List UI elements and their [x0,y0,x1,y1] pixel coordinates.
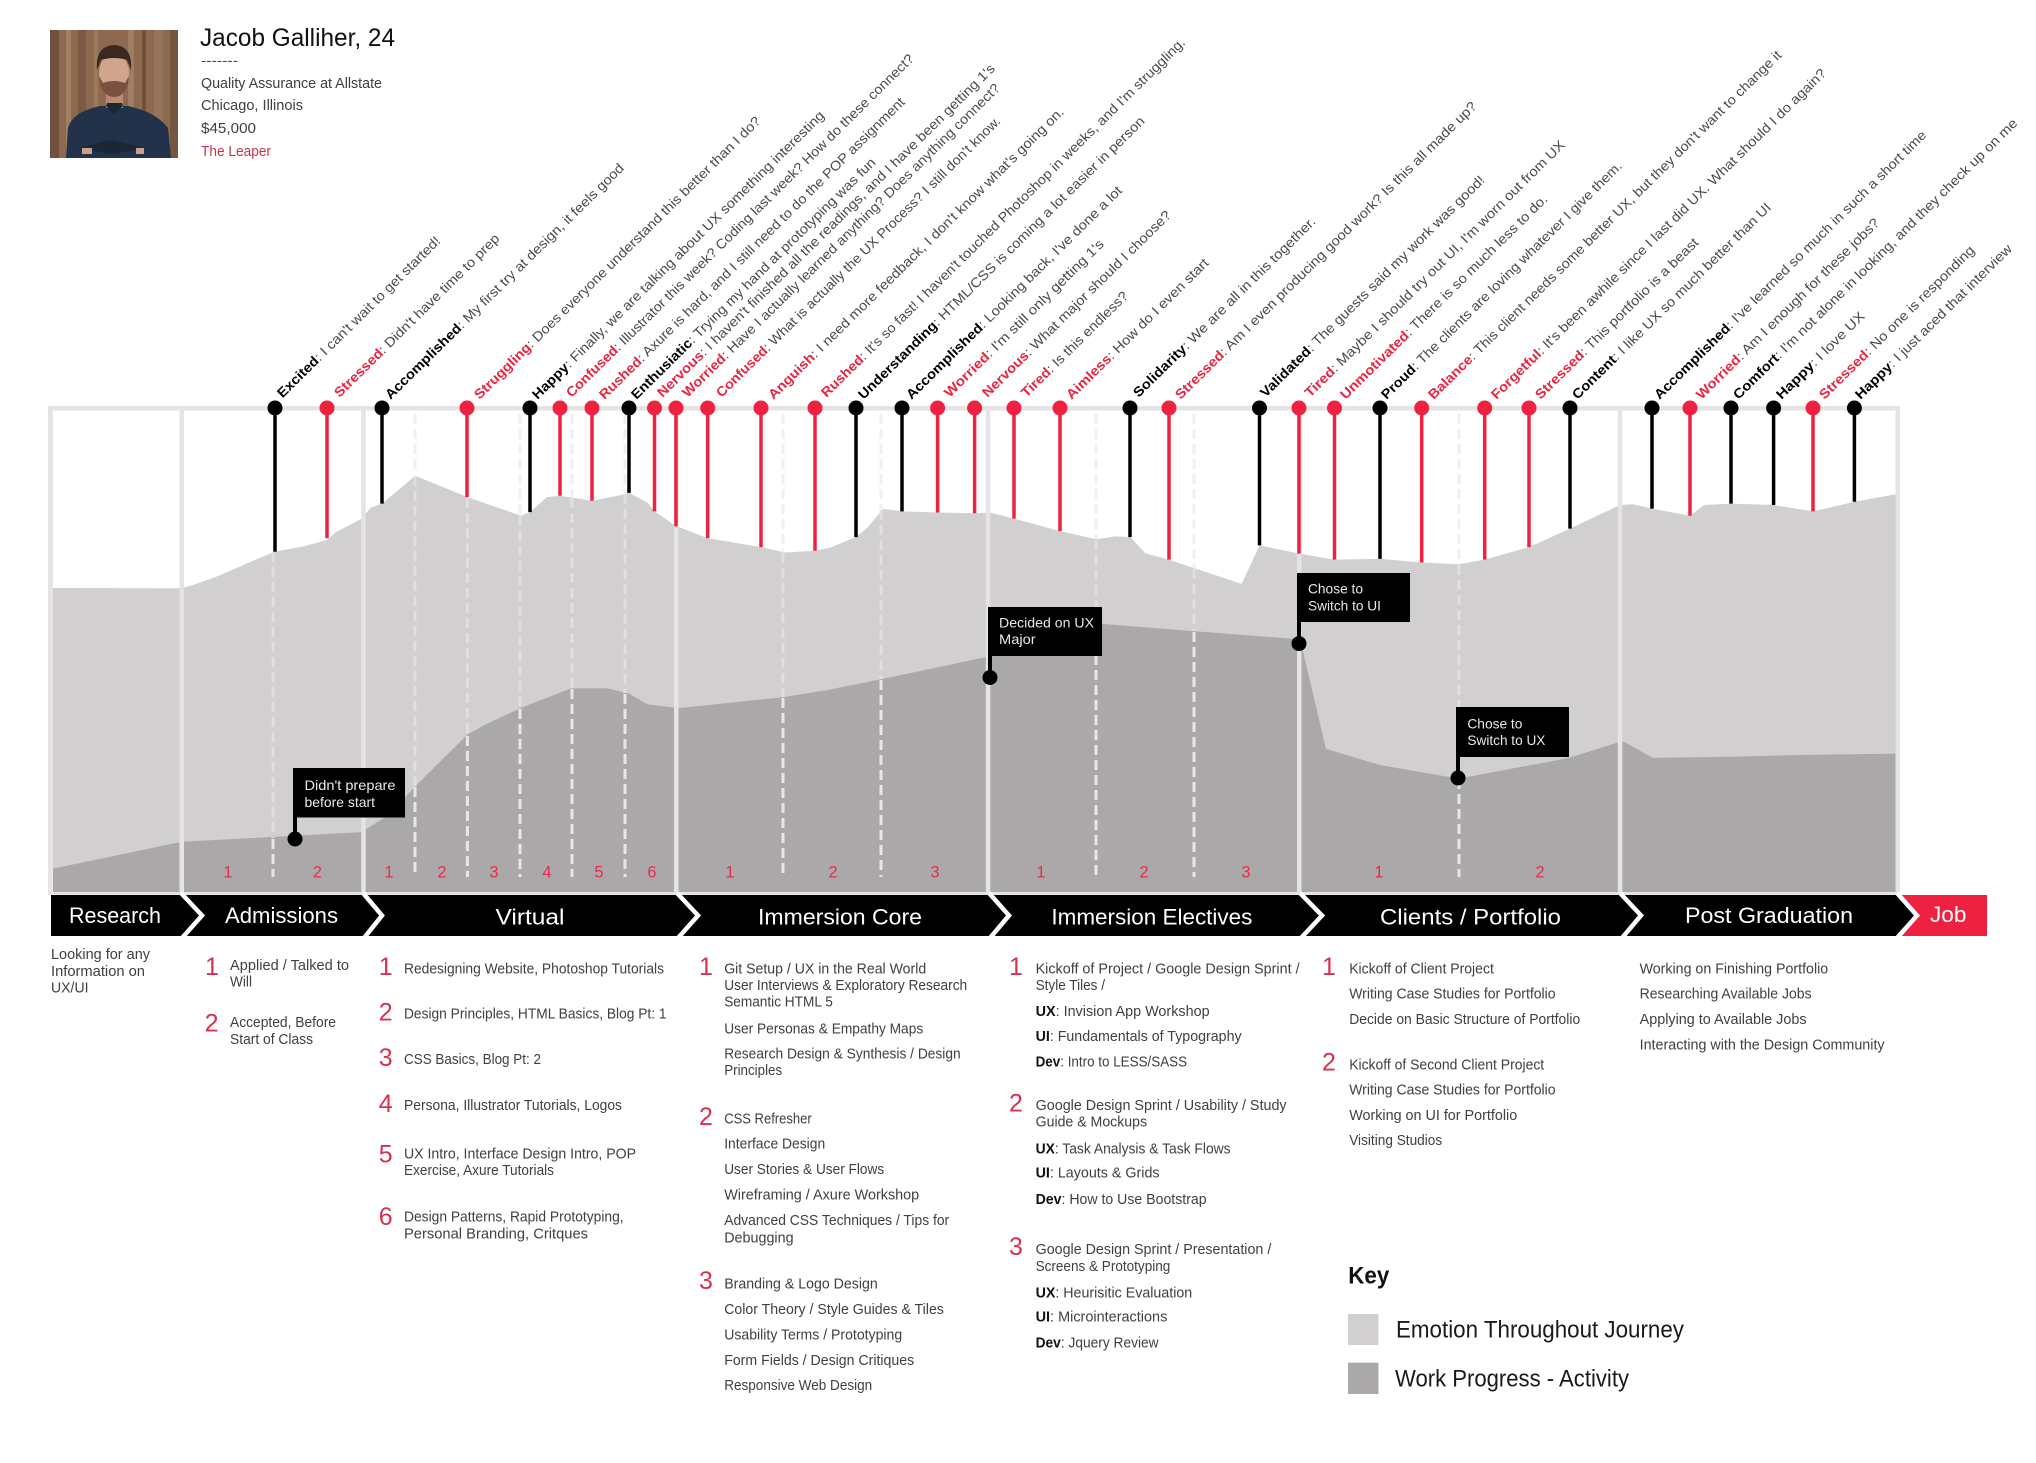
emotion pin: Stressed 2: Stressed: Am I even producing good work? Is this all made up? [1172,99,1480,402]
emotion pin: Anguish: Anguish: I need more feedback, I don't know what's going on. [765,104,1067,402]
sub-phase numbers in chart: 2 [313,864,322,882]
column: Immersion Electives: UX: Heurisitic Evaluation [1036,1285,1192,1301]
phase banner [51,893,1987,938]
column: Clients / Portfolio: Decide on Basic Structure of Portfolio [1349,1012,1580,1028]
emotion pin: Worried: Worried: Have I actually learned anything? Does anything connect? [679,81,1003,400]
emotion pin: Nervous 2: Nervous: What major should I choose? [979,208,1174,400]
sub-phase numbers in chart: 6 [647,864,657,882]
emotion pin: Worried 2: Worried: I'm still only getting 1's [941,236,1107,400]
callout: Chose to Switch to UX: Chose to [1467,716,1523,732]
phase banner: Immersion Core [758,905,922,930]
emotion pin: Happy 3: Happy: I love UX [1773,309,1868,402]
sub-phase numbers in chart: 1 [1374,864,1384,882]
key legend: Key [1348,1262,1390,1289]
emotion pin: Nervous 2 [967,208,1174,513]
column: Virtual: 2 [379,999,393,1027]
column: Immersion Electives: 3 [1009,1233,1023,1261]
emotion pin: Forgetful: Forgetful: It's been awhile since I last did UX. What should I do again? [1488,66,1829,402]
callout: Didn't prepare before start: before start [304,794,375,810]
sub-phase numbers in chart: 3 [930,864,940,882]
sub-phase numbers in chart: 5 [594,864,604,882]
phase banner: Immersion Electives [1051,905,1252,930]
emotion pin: Confused 2 [700,114,1003,538]
phase banner: Research [69,903,161,928]
sub-phase numbers in chart: 1 [384,864,394,882]
column: Immersion Core: Interface Design [724,1136,825,1152]
column: Immersion Core [699,953,967,1394]
sub-phase numbers in chart: 1 [1036,864,1046,882]
key legend [1348,1262,1684,1394]
label: work progress: Work Progress - Activity [1395,1366,1629,1393]
column: Admissions: Applied / Talked to [230,958,349,974]
emotion pin: Aimless: Aimless: How do I even start [1063,255,1212,402]
emotion pin: Stressed 3: Stressed: This portfolio is a beast [1532,235,1702,402]
arrow: chevron after Research [181,893,202,938]
column: Immersion Core: 2 [699,1103,713,1131]
column: Virtual: Personal Branding, Critques [404,1226,588,1242]
column: Post Graduation: Working on Finishing Portfolio [1640,961,1828,977]
emotion pin: Excited: Excited: I can't wait to get started! [274,233,443,401]
emotion pin: Struggling: Struggling: Does everyone understand this better than I do? [471,113,764,402]
column: Post Graduation: Applying to Available Jobs [1640,1012,1807,1028]
column: Virtual: Design Patterns, Rapid Prototyping, [404,1210,624,1226]
emotion pin: Nervous: Nervous: I haven't finished all the readings, and I have been getting 1's [654,61,998,400]
emotion pin: Understanding [848,113,1148,537]
sub-phase numbers in chart: 2 [828,864,838,882]
emotion pin: Tired 2 [1292,137,1568,554]
emotion pin: Content: Content: I like UX so much better than UI [1569,200,1774,402]
column: Immersion Core: User Stories & User Flows [724,1162,884,1178]
column: Admissions: 1 [205,953,219,981]
emotion pin: Stressed: Stressed: Didn't have time to prep [331,231,503,400]
emotion pin: Unmotivated: Unmotivated: There is so much less to do. [1337,191,1551,402]
callout: Chose to Switch to UI: Switch to UI [1308,598,1381,614]
callout: Chose to Switch to UX [1450,707,1569,786]
column: Clients / Portfolio: 2 [1322,1049,1336,1077]
phase banner: Admissions [225,903,338,928]
emotion pin: Stressed 4: Stressed: No one is responding [1816,243,1978,402]
emotion pin: Happy [522,108,827,512]
column: Immersion Electives: UI: Layouts & Grids [1036,1166,1160,1182]
emotion pin: Rushed 2 [808,35,1188,551]
column: Admissions: Start of Class [230,1032,313,1048]
column: Immersion Core: Usability Terms / Prototyping [724,1327,902,1343]
emotion pin: Forgetful [1477,66,1829,560]
emotion pin: Happy 4: Happy: I just aced that interview [1852,241,2015,402]
phase banner: Post Graduation [1685,903,1853,928]
column: Immersion Electives: 2 [1009,1090,1023,1118]
column: Virtual: 4 [379,1090,393,1118]
column: Immersion Electives: Screens & Prototyping [1036,1259,1170,1275]
column: Immersion Core: 3 [699,1267,713,1295]
column: Immersion Core: User Personas & Empathy Maps [724,1021,923,1037]
column: Immersion Electives: 1 [1009,953,1023,981]
column: Virtual: UX Intro, Interface Design Intro, POP [404,1146,636,1162]
column: Virtual [379,953,666,1242]
column: Immersion Core: Git Setup / UX in the Real World [724,961,926,977]
emotion pin: Stressed 3 [1522,235,1702,547]
column: Immersion Core: Research Design & Synthesis / Design [724,1046,961,1062]
column: Immersion Electives: Dev: Jquery Review [1036,1336,1159,1352]
emotion pin: Excited [268,233,443,552]
area: emotion throughout journey [53,476,1896,892]
column: Post Graduation: Interacting with the Design Community [1640,1037,1885,1053]
column: Clients / Portfolio: Visiting Studios [1349,1133,1442,1149]
emotion pin: Tired: Tired: Is this endless? [1018,288,1131,400]
column: Immersion Electives: UX: Task Analysis & Task Flows [1036,1141,1231,1157]
separator dashes: ------- [201,52,238,68]
emotion pin: Confused: Confused: Illustrator this week? Coding last week? How do these connect? [563,51,917,400]
emotion pin: Comfort: Comfort: I'm not alone in looking, and they check up on me [1730,116,2020,402]
area: work progress [53,624,1896,892]
emotion pin: Unmotivated [1327,191,1551,560]
column: Virtual: Redesigning Website, Photoshop Tutorials [404,961,664,977]
column: Admissions [205,953,349,1048]
callout: Chose to Switch to UI: Chose to [1308,581,1363,597]
arrow: chevron after Admissions [363,893,382,938]
column: Clients / Portfolio: Kickoff of Client Project [1349,961,1494,977]
column: Admissions: Accepted, Before [230,1015,336,1031]
emotion pin: Stressed [320,231,503,538]
emotion pin: Stressed 2 [1162,99,1480,560]
column: Post Graduation: Researching Available Jobs [1640,986,1812,1002]
column: Virtual: Persona, Illustrator Tutorials, Logos [404,1098,622,1114]
column: Clients / Portfolio: Writing Case Studies for Portfolio [1349,1082,1556,1098]
column: Immersion Electives: UX: Invision App Workshop [1036,1004,1210,1020]
emotion pin: Content [1562,200,1774,529]
column: Virtual: 5 [379,1141,393,1169]
emotion pin: Balance: Balance: This client needs some better UX, but they don't want to change it [1425,47,1785,402]
column: Immersion Core: Semantic HTML 5 [724,995,833,1011]
column: Immersion Core: Branding & Logo Design [724,1276,878,1292]
column: Virtual: Design Principles, HTML Basics, Blog Pt: 1 [404,1006,666,1022]
profile details: Chicago, Illinois [201,98,303,114]
column: Post Graduation [1640,961,1885,1053]
emotion pin: Proud: Proud: The clients are loving whatever I give them. [1378,158,1625,402]
column: Immersion Core: User Interviews & Exploratory Research [724,978,967,994]
emotion pin: Rushed 2: Rushed: It's so fast! I haven't touched Photoshop in weeks, and I'm struggling. [818,35,1188,400]
column: Immersion Electives: Style Tiles / [1036,978,1106,994]
sub-phase numbers in chart: 3 [489,864,499,882]
column: Immersion Electives: Google Design Sprint / Usability / Study [1036,1098,1287,1114]
name heading: Jacob Galliher, 24 [200,24,395,52]
column: Immersion Electives: Kickoff of Project / Google Design Sprint / [1036,961,1301,977]
emotion pin: Happy 3 [1766,309,1868,505]
sub-phase numbers in chart: 2 [1535,864,1545,882]
column: Immersion Electives: UI: Microinteractions [1036,1310,1167,1326]
callout: Didn't prepare before start [288,768,405,846]
arrow: chevron after Post Graduation [1897,893,1917,938]
sub-phase numbers in chart: 2 [1139,864,1149,882]
column: Virtual: 3 [379,1044,393,1072]
emotion pin: Happy: Happy: Finally, we are talking about UX something interesting [529,108,827,402]
emotion pin: Worried 3: Worried: Am I enough for these jobs? [1693,215,1882,402]
sub-phase numbers in chart [223,864,1545,882]
column: Admissions: 2 [205,1010,219,1038]
emotion pin: Happy 4 [1847,241,2015,502]
emotion pin: Rushed [584,94,908,501]
emotion pin: Accomplished 2: Accomplished: Looking back, I've done a lot [903,183,1125,402]
emotion pin: Anguish [754,104,1067,547]
emotion pin: Understanding: Understanding: HTML/CSS is coming a lot easier in person [855,113,1148,402]
callout: Chose to Switch to UX: Switch to UX [1467,732,1546,748]
column: Virtual: CSS Basics, Blog Pt: 2 [404,1052,541,1068]
column: Immersion Core: Wireframing / Axure Workshop [724,1187,919,1203]
emotion pin: Solidarity [1122,214,1319,537]
arrow: chevron after Immersion Core [989,893,1009,938]
emotion pin: Stressed 4 [1806,243,1978,511]
emotion pin: Accomplished 2 [894,183,1125,511]
emotion pin: Confused 2: Confused: What is actually the UX Process? I still don't know. [713,114,1003,400]
column: Virtual: 6 [379,1203,393,1231]
label: emotion: Emotion Throughout Journey [1396,1316,1684,1343]
sub-phase numbers in chart: 1 [223,864,233,882]
profile details: The Leaper [201,144,271,160]
column: Immersion Core: Color Theory / Style Guides & Tiles [724,1302,944,1318]
column: Immersion Electives: Dev: How to Use Bootstrap [1036,1192,1207,1208]
column: Immersion Electives: Dev: Intro to LESS/SASS [1036,1055,1187,1071]
callout: Decided on UX Major [982,607,1102,685]
phase banner: Clients / Portfolio [1380,905,1561,930]
sub-phase numbers in chart: 3 [1241,864,1251,882]
emotion pin: Accomplished 3 [1644,127,1929,509]
emotion pin: Validated: Validated: The guests said my work was good! [1257,172,1488,400]
emotion pin: Aimless [1052,255,1212,531]
column: Research: Looking for any [51,947,151,963]
column: Immersion Electives: Google Design Sprint / Presentation / [1036,1242,1272,1258]
sub-phase numbers in chart: 1 [725,864,735,882]
emotion pin: Worried 3 [1682,215,1882,516]
emotion pin: Enthusiatic [622,155,879,493]
sub-phase numbers in chart: 4 [542,864,552,882]
emotion pin: Solidarity: Solidarity: We are all in this together. [1130,214,1319,400]
column: Virtual: Exercise, Axure Tutorials [404,1163,554,1179]
chart: journey areas [53,476,1896,892]
arrow: chevron after Clients / Portfolio [1620,893,1641,938]
emotion pin: Comfort [1724,116,2020,504]
emotion pin: Struggling [460,113,764,497]
emotion pin: Enthusiatic: Enthusiatic: Trying my hand at prototyping was fun [628,155,879,402]
column: Clients / Portfolio: Kickoff of Second Client Project [1349,1057,1544,1073]
callout: Decided on UX Major: Decided on UX [999,614,1095,630]
emotion pin: Tired 2: Tired: Maybe I should try out UI, I'm worn out from UX [1302,137,1568,400]
emotion pin: Accomplished 3: Accomplished: I've learned so much in such a short time [1651,127,1929,402]
column: Research [51,947,151,997]
column: Clients / Portfolio [1322,953,1580,1149]
callout: Didn't prepare before start: Didn't prepare [304,777,396,793]
column: Immersion Core: Principles [724,1063,782,1079]
profile photo [50,30,178,158]
column: Immersion Electives: Guide & Mockups [1036,1115,1147,1131]
arrow: chevron after Immersion Electives [1300,893,1322,938]
column: Virtual: 1 [379,953,393,981]
column: Immersion Electives: UI: Fundamentals of Typography [1036,1029,1242,1045]
column: Immersion Core: Responsive Web Design [724,1378,872,1394]
emotion pin: Balance [1414,47,1785,563]
emotion pin: Tired [1006,288,1131,519]
emotion pin: Accomplished [374,160,627,504]
column: Immersion Core: Debugging [724,1230,794,1246]
emotion pin: Confused [552,51,917,496]
column: Research: UX/UI [51,981,88,997]
column: Immersion Core: 1 [699,953,713,981]
column: Immersion Core: Advanced CSS Techniques / Tips for [724,1213,949,1229]
column: Immersion Core: CSS Refresher [724,1111,812,1127]
column: Clients / Portfolio: Working on UI for Portfolio [1349,1108,1517,1124]
arrow: chevron after Virtual [677,893,698,938]
phase banner: Job [1930,902,1966,927]
profile details [201,76,382,160]
profile details: $45,000 [201,121,256,137]
sub-phase numbers in chart: 2 [437,864,447,882]
column: Clients / Portfolio: 1 [1322,953,1336,981]
column: Clients / Portfolio: Writing Case Studies for Portfolio [1349,986,1556,1002]
column: Research: Information on [51,964,145,980]
emotion pin: Worried 2 [930,236,1107,512]
swatch: work progress [1348,1363,1378,1394]
emotion pin: Validated [1252,172,1488,545]
callout: Chose to Switch to UI [1292,573,1410,651]
column: Immersion Core: Form Fields / Design Critiques [724,1353,914,1369]
callout: Decided on UX Major: Major [999,631,1036,647]
emotion pin: Worried [668,81,1003,526]
emotion pin: Nervous [647,61,998,511]
column: Admissions: Will [230,975,252,991]
column: Immersion Electives [1009,953,1301,1352]
phase banner: Virtual [496,905,564,930]
emotion pin: Rushed: Rushed: Axure is hard, and I still need to do the POP assignment [596,94,908,402]
profile details: Quality Assurance at Allstate [201,76,382,92]
swatch: emotion [1348,1314,1378,1345]
emotion pin: Accomplished: Accomplished: My first try at design, it feels good [382,160,627,402]
emotion pin: Proud [1372,158,1625,559]
